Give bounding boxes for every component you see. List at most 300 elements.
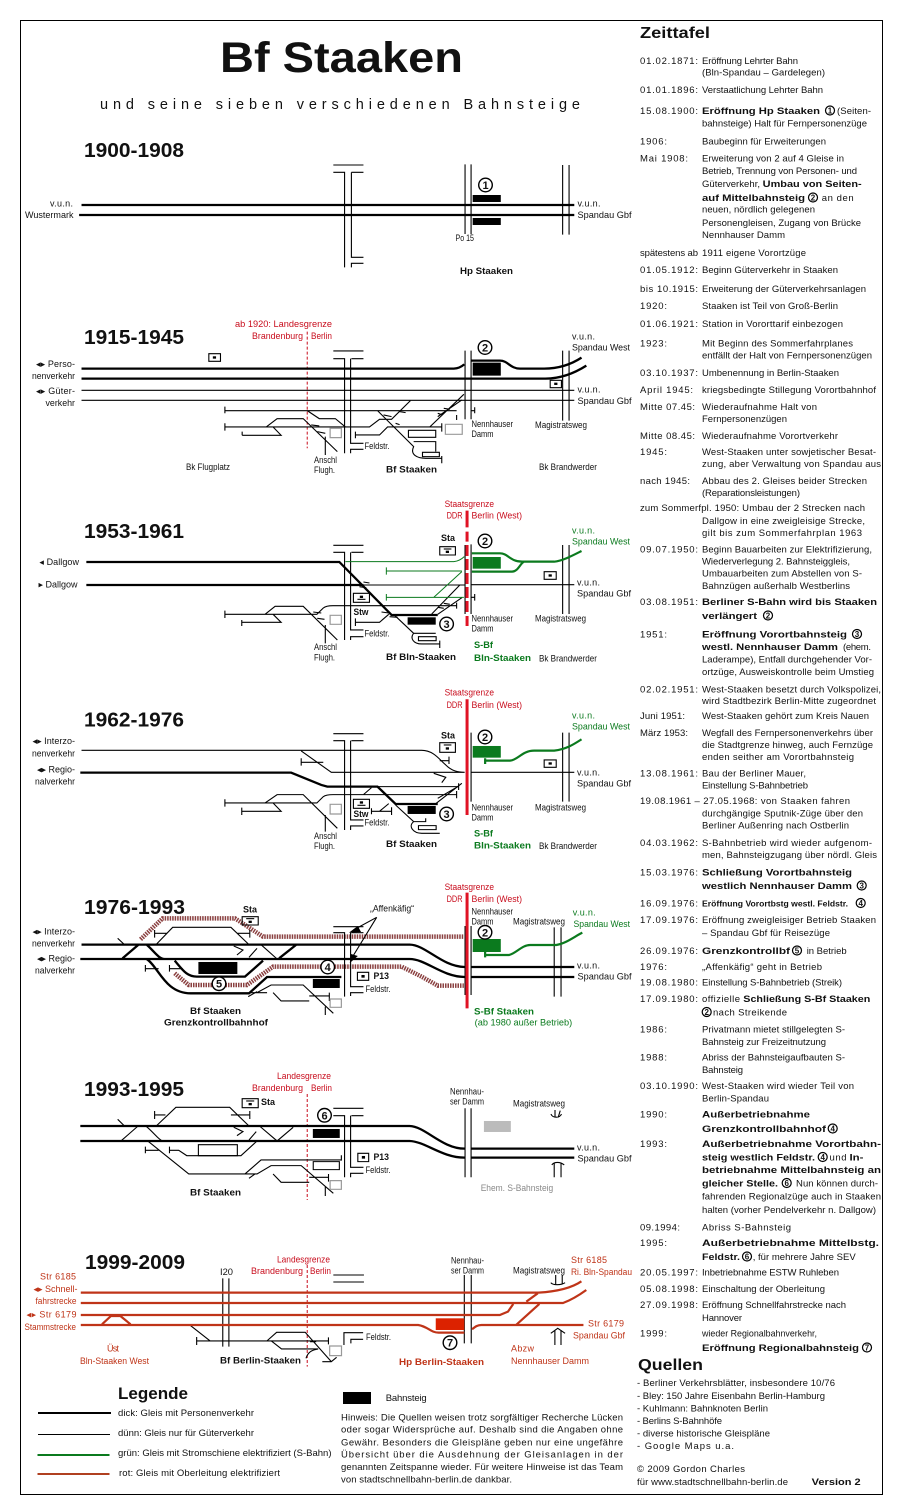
entry 1986: 1986: <box>640 1024 667 1036</box>
panel: 1999-2009 <box>24 1252 632 1367</box>
entry 16.09.1976: 16.09.1976: <box>640 898 698 910</box>
entry 1908: Güterverkehr, <box>702 179 760 190</box>
S-Bf name: Bln-Staaken <box>474 840 531 850</box>
entry 1871: (Bln-Spandau – Gardelegen) <box>702 68 825 78</box>
label DDR: DDR <box>447 894 463 904</box>
sources list: - diverse historische Gleispläne <box>637 1429 770 1440</box>
legend line: green <box>38 1454 110 1456</box>
entry 07.45: Wiederaufnahme Halt von <box>702 402 817 413</box>
entry 13.08.1961: Einstellung S-Bahnbetrieb <box>702 780 808 792</box>
entry 16.09.1976 <box>640 898 865 910</box>
entry 1906: Baubeginn für Erweiterungen <box>702 136 826 148</box>
track plan 1915-1945 <box>82 332 586 463</box>
entry 1976 <box>640 962 822 973</box>
left label Regio: ◂▸ Regio- <box>37 953 75 963</box>
entry 1993: Außerbetriebnahme Vorortbahn- <box>702 1139 881 1150</box>
entry 26.09.1976: Grenzkontrollbf <box>702 946 791 957</box>
platform number 3 <box>440 617 453 631</box>
entry 1945: West-Staaken unter sowjetischer Besat- <box>702 447 876 458</box>
entry 09.07.1950: Bahnzügen außerhalb Westberlins <box>702 581 850 592</box>
entry 1990 <box>640 1110 837 1135</box>
platform number 7 <box>443 1336 457 1350</box>
entry 1908 <box>640 154 862 241</box>
label Staatsgrenze: Staatsgrenze <box>445 688 494 698</box>
note block: oder sogar Widersprüche auf. Deshalb sind die Angaben ohne <box>341 1424 623 1436</box>
panel: sources <box>637 1357 861 1488</box>
entry 03.08.1951: verlängert <box>702 611 758 622</box>
platform number 2: 2 <box>482 342 488 354</box>
entry 1993: 1993: <box>640 1139 667 1150</box>
entry 1920: 1920: <box>640 301 667 312</box>
label Magistratsweg: Magistratsweg <box>535 802 586 812</box>
entry 17.09.1980: offizielle <box>702 994 740 1005</box>
entry 07.45: Fernpersonenzügen <box>702 414 787 425</box>
left label Regio: ◂▸ Regio- <box>37 764 75 774</box>
entry 1988: Abriss der Bahnsteigaufbauten S- <box>702 1052 845 1064</box>
platform number 2 <box>478 926 492 939</box>
entry 1937: 03.10.1937: <box>640 368 698 379</box>
entry 07.45 <box>640 402 817 425</box>
entry 1923: Mit Beginn des Sommerfahrplanes <box>702 338 853 350</box>
entry 1999: Eröffnung Regionalbahnsteig <box>702 1343 859 1354</box>
heading 1999-2009: 1999-2009 <box>85 1252 185 1274</box>
label Damm: Damm <box>472 916 494 926</box>
platform number 2: 2 <box>482 536 488 548</box>
entry 1997 <box>640 1268 839 1278</box>
entry 19.08.1980: Einstellung S-Bahnbetrieb (Streik) <box>702 978 842 988</box>
sources heading: Quellen <box>638 1357 703 1374</box>
entry 03.08.1951 <box>640 597 877 622</box>
entry 1912: 01.05.1912: <box>640 265 698 276</box>
entry 1986: Privatmann mietet stillgelegten S- <box>702 1024 845 1036</box>
entry 1993: gleicher Stelle. <box>702 1178 778 1190</box>
entry 26.09.1976: in Betrieb <box>807 946 847 957</box>
entry 1976: 1976: <box>640 962 667 973</box>
label Feldstr.: Feldstr. <box>364 628 390 638</box>
right label Str 6179: Str 6179 <box>588 1319 624 1329</box>
right label Spandau West: Spandau West <box>574 919 630 929</box>
entry nach 1945 <box>640 476 867 499</box>
subtitle: und seine sieben verschiedenen Bahnsteige <box>100 97 580 113</box>
platform number 6: 6 <box>321 1110 328 1122</box>
label Magistratsweg: Magistratsweg <box>513 1098 565 1108</box>
panel: 1993-1995 <box>80 1071 632 1200</box>
entry 1995: Außerbetriebnahme Mittelbstg. <box>702 1238 879 1249</box>
S-Bf name: S-Bf Staaken <box>474 1007 534 1017</box>
entry 1961-1968: Berliner Außenring nach Ostberlin <box>702 820 849 832</box>
entry 1995 <box>640 1238 879 1263</box>
entry 1950 summer: gilt bis zum Sommerfahrplan 1963 <box>702 528 862 539</box>
label Nennhauser: Nennhauser <box>472 906 513 916</box>
entry 05.08.1998: 05.08.1998: <box>640 1284 698 1295</box>
label Nennhau-: Nennhau- <box>450 1086 484 1096</box>
entry 1920: Staaken ist Teil von Groß-Berlin <box>702 301 838 312</box>
entry 07.45: Mitte 07.45: <box>640 402 695 413</box>
entry 1871: Eröffnung Lehrter Bahn <box>702 56 798 67</box>
note block: Übersicht über die Ausdehnung der Gleisanlagen in der <box>341 1450 623 1460</box>
entry 13.08.1961 <box>640 768 808 792</box>
entry 1990: 1990: <box>640 1110 667 1120</box>
label Feldstr.: Feldstr. <box>364 817 390 827</box>
label Stw: Stw <box>354 607 369 617</box>
label ser Damm: ser Damm <box>451 1265 484 1275</box>
entry 1900: 1 <box>828 106 833 116</box>
entry 1908: Umbau von Seiten- <box>763 179 862 190</box>
entry 1990: Außerbetriebnahme <box>702 1110 810 1120</box>
platform number 3: 3 <box>444 619 450 631</box>
right label v.u.n.: v.u.n. <box>572 526 595 536</box>
entry 1950 summer: zum Sommerfpl. 1950: Umbau der 2 Strecken nach <box>640 503 865 514</box>
entry 1951: 3 <box>855 630 860 639</box>
label Sta: Sta <box>441 533 456 543</box>
platform number 7: 7 <box>447 1338 453 1350</box>
entry 03.08.1951: Berliner S-Bahn wird bis Staaken <box>702 597 877 608</box>
entry 1986 <box>640 1024 845 1048</box>
label Wustermark: Wustermark <box>25 210 74 220</box>
left label fahrstrecke: fahrstrecke <box>36 1296 76 1306</box>
entry 1999: 7 <box>865 1344 870 1352</box>
label Anschl: Anschl <box>314 642 337 652</box>
label Affenkäfig: „Affenkäfig“ <box>370 903 414 913</box>
right label v.u.n.: v.u.n. <box>578 384 600 394</box>
border label Berlin: Berlin <box>311 331 332 341</box>
label ser Damm: ser Damm <box>450 1096 484 1106</box>
label Magistratsweg: Magistratsweg <box>535 420 587 430</box>
label Nennhauser: Nennhauser <box>472 802 513 812</box>
legend text: thick: dick: Gleis mit Personenverkehr <box>118 1408 254 1419</box>
entry 1961-1968: 19.08.1961 – 27.05.1968: von Staaken fahren <box>640 796 850 807</box>
entry 1908: Personengleisen, Zugang von Brücke <box>702 218 861 229</box>
entry April 1945: kriegsbedingte Stillegung Vorortbahnhof <box>702 385 876 396</box>
entry 16.09.1976: Eröffnung Vorortbstg westl. Feldstr. <box>702 898 848 908</box>
platform number 2 <box>478 341 492 354</box>
track plan 1976-1993 <box>80 893 582 1015</box>
entry 13.08.1961: 13.08.1961: <box>640 768 698 780</box>
entry 02.02.1951: West-Staaken besetzt durch Volkspolizei, <box>702 684 881 696</box>
entry März 1953: enden seither am Vorortbahnsteig <box>702 752 854 763</box>
entry 1937: Umbenennung in Berlin-Staaken <box>702 368 839 379</box>
left label nenverkehr: nenverkehr <box>32 939 75 949</box>
entry 27.09.1998 <box>640 1300 846 1324</box>
label Bk Brandwerder: Bk Brandwerder <box>539 653 597 663</box>
left label Interzo: ◂▸ Interzo- <box>32 926 75 936</box>
entry 1993: betriebnahme Mittelbahnsteig an <box>702 1165 881 1176</box>
platform number 3: 3 <box>444 809 450 821</box>
label Bk Brandwerder: Bk Brandwerder <box>539 841 597 851</box>
label Staatsgrenze: Staatsgrenze <box>445 882 494 892</box>
legend line: thin <box>38 1434 110 1435</box>
label Anschl: Anschl <box>314 831 337 841</box>
entry 17.09.1980: nach Streikende <box>713 1008 787 1018</box>
entry 17.09.1980 <box>640 994 871 1018</box>
left label Interzo: ◂▸ Interzo- <box>32 736 75 746</box>
entry 1961-1968: durchgängige Sputnik-Züge über den <box>702 808 863 820</box>
label P13: P13 <box>374 971 389 981</box>
legend text: thin: dünn: Gleis nur für Güterverkehr <box>118 1428 254 1439</box>
entry 1995: Feldstr. <box>702 1252 740 1263</box>
entry 1923 <box>640 338 872 362</box>
legend <box>38 1384 427 1479</box>
entry 1988 <box>640 1052 845 1076</box>
entry 02.02.1951 <box>640 684 881 707</box>
left label Stammstrecke: Stammstrecke <box>24 1322 76 1332</box>
right label v.u.n.: v.u.n. <box>573 907 596 917</box>
entry 04.03.1962: S-Bahnbetrieb wird wieder aufgenom- <box>702 838 872 849</box>
right label Spandau West: Spandau West <box>572 722 630 732</box>
label Abzw: Abzw <box>511 1344 534 1354</box>
arrows to Affenkäfig <box>349 917 377 963</box>
entry 13.08.1961: Bau der Berliner Mauer, <box>702 768 806 780</box>
entry 03.10.1990: West-Staaken wird wieder Teil von <box>702 1081 854 1092</box>
entry 17.09.1976: 17.09.1976: <box>640 915 698 926</box>
entry 16.09.1976: 4 <box>858 899 863 908</box>
entry 1993: In- <box>850 1152 864 1164</box>
entry März 1953: März 1953: <box>640 728 688 739</box>
right label v.u.n.: v.u.n. <box>577 577 600 587</box>
entry März 1953: Wegfall des Fernpersonenverkehrs über <box>702 728 873 739</box>
entry 1993: 4 <box>820 1153 825 1162</box>
entry 1951: ortzüge, Ausweiskontrolle beim Umstieg <box>702 667 874 678</box>
entry 03.10.1990: 03.10.1990: <box>640 1081 698 1092</box>
entry 08.45: Wiederaufnahme Vorortverkehr <box>702 431 838 442</box>
label Damm: Damm <box>472 429 494 439</box>
entry April 1945: April 1945: <box>640 385 693 396</box>
label Brandenburg: Brandenburg <box>251 1266 303 1276</box>
entry 17.09.1976: Eröffnung zweigleisiger Betrieb Staaken <box>702 915 876 926</box>
sources list: - Google Maps u.a. <box>637 1441 734 1452</box>
entry 03.10.1990 <box>640 1081 854 1104</box>
label left: v.u.n. <box>50 198 73 208</box>
entry 1951: westl. Nennhauser Damm <box>701 642 838 653</box>
platform number 4: 4 <box>325 962 332 974</box>
entry 1915: bis 10.1915: <box>640 284 698 295</box>
note block: Gewähr. Besonders die Gleispläne geben nur eine ungefähre <box>341 1438 623 1448</box>
entry 05.08.1998: Einschaltung der Oberleitung <box>702 1284 825 1295</box>
right label Str 6185: Str 6185 <box>571 1255 607 1265</box>
entry 1995: 6 <box>745 1252 750 1262</box>
entry 1995: , für mehrere Jahre SEV <box>753 1252 856 1263</box>
entry 1908: an den <box>822 193 854 204</box>
panel: 1900-1908 <box>25 140 632 276</box>
track plan 1962-1976 <box>80 699 582 833</box>
entry 27.09.1998: Hannover <box>702 1313 742 1324</box>
platform number 2: 2 <box>482 927 488 939</box>
label I20: I20 <box>220 1267 233 1277</box>
left label nalverkehr: nalverkehr <box>35 965 75 975</box>
station name: Bf Bln-Staaken <box>386 652 456 662</box>
note block: genannten Zeitspanne wieder. Für weitere Hinweise ist das Team <box>341 1462 623 1473</box>
entry 1999 <box>640 1328 872 1354</box>
entry 1896: 01.01.1896: <box>640 85 698 96</box>
label Dallgow east: ▸ Dallgow <box>38 579 78 589</box>
entry 1911: 1911 eigene Vorortzüge <box>702 248 806 259</box>
entry 1920 <box>640 301 838 312</box>
entry 1945: 1945: <box>640 447 667 458</box>
left label nalverkehr: nalverkehr <box>35 776 75 786</box>
platform number 2: 2 <box>482 732 488 744</box>
entry 17.09.1980: 2 <box>704 1008 709 1017</box>
label Flugh.: Flugh. <box>314 465 335 475</box>
entry 1993: und <box>830 1152 846 1164</box>
legend line: thick <box>38 1412 111 1414</box>
entry 1871 <box>640 56 825 78</box>
entry 04.03.1962: 04.03.1962: <box>640 838 698 849</box>
panel: timeline <box>640 25 881 1354</box>
heading 1900-1908: 1900-1908 <box>84 140 184 162</box>
entry 1896: Verstaatlichung Lehrter Bahn <box>702 85 823 96</box>
panel: 1962-1976 <box>32 688 632 851</box>
label Sta: Sta <box>243 904 258 914</box>
entry nach 1945: nach 1945: <box>640 476 690 487</box>
entry 1908: Nennhauser Damm <box>702 230 785 241</box>
platform number 2 <box>478 730 492 744</box>
panel: 1976-1993 <box>32 882 632 1028</box>
left label freight: ◂▸ Güter- <box>36 386 75 396</box>
entry 09.07.1950: Beginn Bauarbeiten zur Elektrifizierung, <box>702 544 872 556</box>
entry 1923: 1923: <box>640 338 667 350</box>
station name Hp: Hp Berlin-Staaken <box>399 1357 484 1367</box>
entry 1908: Mai 1908: <box>640 154 688 164</box>
version: Version 2 <box>812 1477 861 1488</box>
platform number 4 <box>321 960 335 974</box>
timeline heading: Zeittafel <box>640 25 710 42</box>
label Magistratsweg: Magistratsweg <box>513 916 565 926</box>
entry 04.03.1962 <box>640 838 877 861</box>
station name 2: Grenzkontrollbahnhof <box>164 1017 269 1027</box>
label Berlin West: Berlin (West) <box>472 894 522 904</box>
platform number 1: 1 <box>482 180 489 192</box>
label former S-Bahn platform: Ehem. S-Bahnsteig <box>481 1183 553 1193</box>
note block <box>341 1412 623 1486</box>
entry 09.1994 <box>640 1222 791 1234</box>
label Nennhauser Damm: Nennhauser Damm <box>511 1356 589 1366</box>
entry 1945 <box>640 447 881 470</box>
credit URL: für www.stadtschnellbahn-berlin.de <box>637 1477 788 1488</box>
right label Spandau Gbf: Spandau Gbf <box>578 396 632 406</box>
entry 09.07.1950: Umbauarbeiten zum Abstellen von S- <box>702 568 862 580</box>
label Sta: Sta <box>441 730 456 740</box>
label Staatsgrenze: Staatsgrenze <box>445 499 494 509</box>
entry 1951: Eröffnung Vorortbahnsteig <box>702 630 847 640</box>
entry 1951: Laderampe), Entfall durchgehender Vor- <box>702 654 872 666</box>
entry 15.03.1976: 3 <box>859 882 864 890</box>
sources list: - Kuhlmann: Bahnknoten Berlin <box>637 1404 768 1415</box>
right label Spandau West: Spandau West <box>572 537 630 547</box>
platform number 5 <box>212 977 226 991</box>
label Berlin West: Berlin (West) <box>472 700 522 710</box>
right label v.u.n.: v.u.n. <box>572 711 595 721</box>
entry nach 1945: (Reparationsleistungen) <box>702 488 800 499</box>
entry 1988: Bahnsteig <box>702 1065 743 1076</box>
entry 1900: bahnsteige) Halt für Fernpersonenzüge <box>702 118 867 130</box>
label Landesgrenze: Landesgrenze <box>277 1254 330 1264</box>
right label Spandau Gbf: Spandau Gbf <box>577 589 632 599</box>
right label Spandau Gbf: Spandau Gbf <box>577 778 632 788</box>
entry 19.08.1980: 19.08.1980: <box>640 978 698 988</box>
label Anschl: Anschl <box>314 455 337 465</box>
entry 1915: Erweiterung der Güterverkehrsanlagen <box>702 284 866 295</box>
left label Schnell-: ◂▸ Schnell- <box>34 1284 78 1294</box>
label Bk Brandwerder: Bk Brandwerder <box>539 462 597 472</box>
legend heading: Legende <box>118 1384 188 1403</box>
label Sta: Sta <box>261 1097 276 1107</box>
label Po 15: Po 15 <box>456 233 474 243</box>
label Nennhau-: Nennhau- <box>451 1255 484 1265</box>
entry 1900 <box>640 106 871 130</box>
sources list: - Berlins S-Bahnhöfe <box>637 1416 722 1427</box>
entry 1951: 1951: <box>640 630 667 640</box>
entry 1950 summer <box>640 503 865 539</box>
left label Str 6179: ◂▸ Str 6179 <box>26 1310 76 1320</box>
entry 1896 <box>640 85 823 96</box>
entry 1993: 6 <box>784 1179 789 1188</box>
entry 27.09.1998: 27.09.1998: <box>640 1300 698 1311</box>
label Üst: Üst <box>107 1344 119 1354</box>
heading 1953-1961: 1953-1961 <box>84 521 184 543</box>
entry 1908: Erweiterung von 2 auf 4 Gleise in <box>702 154 844 164</box>
legend text: green: grün: Gleis mit Stromschiene elektrifiziert (S-Bahn) <box>118 1448 332 1459</box>
label Magistratsweg: Magistratsweg <box>513 1265 565 1275</box>
label Feldstr.: Feldstr. <box>366 1165 390 1175</box>
left label passenger 2: nenverkehr <box>32 371 75 381</box>
note block: Hinweis: Die Quellen weisen trotz sorgfältiger Recherche Lücken <box>341 1412 623 1424</box>
platform number 1 <box>479 178 492 192</box>
S-Bf label: S-Bf <box>474 828 494 838</box>
right label Ri. Bln-Spandau: Ri. Bln-Spandau <box>571 1267 632 1277</box>
entry 1976: „Affenkäfig“ geht in Betrieb <box>702 962 822 973</box>
label right: v.u.n. <box>578 198 600 208</box>
entry 1900: (Seiten- <box>837 106 871 117</box>
label Damm: Damm <box>472 623 494 633</box>
note block: von stadtschnellbahn-berlin.de dankbar. <box>341 1474 512 1486</box>
entry 1990: Grenzkontrollbahnhof <box>702 1124 827 1135</box>
label Nennhauser: Nennhauser <box>472 419 513 429</box>
entry 1923: entfällt der Halt von Fernpersonenzügen <box>702 350 872 362</box>
entry 1993: halten (vorher Pendelverkehr n. Dallgow) <box>702 1205 876 1216</box>
label Brandenburg: Brandenburg <box>252 1083 303 1093</box>
label DDR: DDR <box>447 700 463 710</box>
entry 08.45 <box>640 431 838 442</box>
entry 17.09.1980: 17.09.1980: <box>640 994 698 1005</box>
entry März 1953: die Stadtgrenze hinweg, auch Fernzüge <box>702 740 873 751</box>
entry 1921 <box>640 319 843 330</box>
label Nennhauser: Nennhauser <box>472 613 513 623</box>
station name: Hp Staaken <box>460 266 513 276</box>
left label passenger: ◂▸ Perso- <box>36 359 75 369</box>
entry 03.08.1951: 2 <box>766 612 771 620</box>
entry 02.02.1951: wird Stadtbezirk Berlin-Mitte zugeordnet <box>701 696 876 707</box>
right label Spandau Gbf: Spandau Gbf <box>578 972 632 982</box>
entry 1921: Station in Vororttarif einbezogen <box>702 319 843 330</box>
right label v.u.n.: v.u.n. <box>572 332 595 342</box>
entry 09.07.1950: Wiederverlegung 2. Bahnsteiggleis, <box>702 556 850 568</box>
entry 1961-1968 <box>640 796 863 832</box>
label Feldstr.: Feldstr. <box>366 984 390 994</box>
entry 1995: 1995: <box>640 1238 667 1249</box>
label Feldstr.: Feldstr. <box>366 1332 391 1342</box>
entry 1908: 2 <box>811 194 816 202</box>
entry 1911: spätestens ab <box>640 248 698 259</box>
right label v.u.n.: v.u.n. <box>577 767 600 777</box>
sources list: - Bley: 150 Jahre Eisenbahn Berlin-Hamburg <box>637 1391 825 1402</box>
entry Juni 1951: West-Staaken gehört zum Kreis Nauen <box>702 711 869 722</box>
left label Str 6185: Str 6185 <box>40 1272 76 1282</box>
right label Spandau Gbf: Spandau Gbf <box>573 1331 625 1341</box>
label Feldstr.: Feldstr. <box>364 441 390 451</box>
entry 1986: Bahnsteig zur Freizeitnutzung <box>702 1037 826 1048</box>
entry 26.09.1976 <box>640 946 847 957</box>
entry 1993: fahrenden Regionalzüge auch in Staaken <box>702 1192 881 1202</box>
